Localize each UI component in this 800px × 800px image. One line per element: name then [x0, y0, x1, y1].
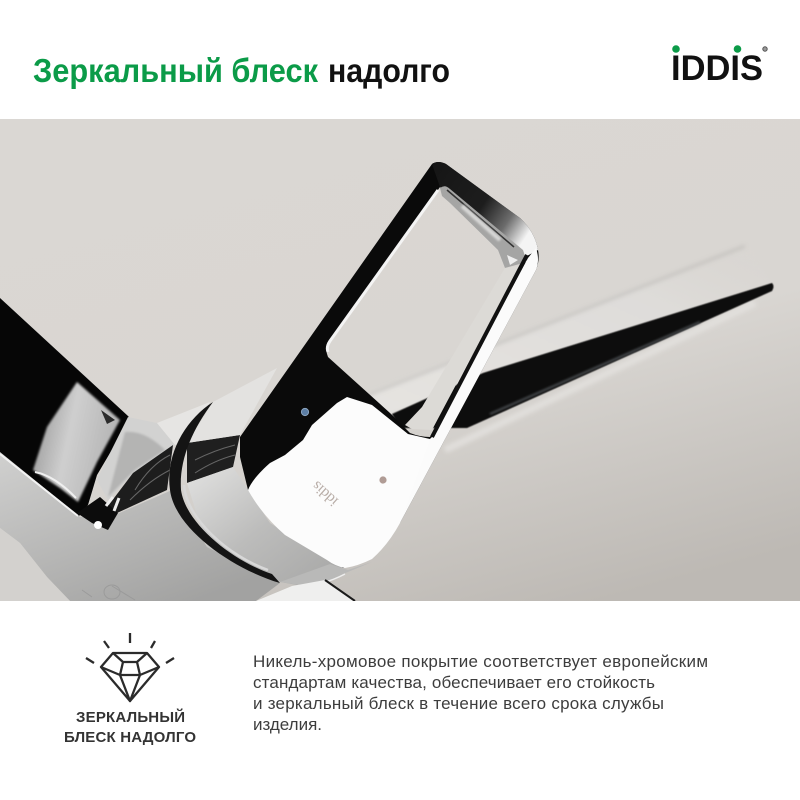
base body of the faucet: [0, 452, 280, 601]
description text: Никель-хромовое покрытие соответствует европейским: [253, 652, 708, 671]
red indicator dot: [379, 476, 387, 484]
photo: chrome faucet close-up: [0, 119, 800, 601]
title: Зеркальный блеск: [33, 52, 318, 89]
icon caption: БЛЕСК НАДОЛГО: [64, 729, 196, 746]
base marking: [82, 585, 135, 600]
white rim along the hole: [327, 190, 438, 352]
title: надолго: [328, 52, 450, 89]
icon: diamond with rays: [86, 633, 174, 701]
left spout: black chrome: [0, 298, 130, 516]
handle frame: [240, 162, 539, 568]
right white strip: [400, 250, 538, 524]
inner bevel right: [405, 352, 473, 430]
neck chrome: [108, 417, 130, 456]
logo: IDDIS: IDDIS: [671, 49, 763, 88]
bottom reflection and black line: [256, 580, 355, 601]
description text: изделия.: [253, 715, 322, 734]
collar lower surface: [187, 467, 343, 585]
description text: стандартам качества, обеспечивает его стойкость: [253, 673, 655, 692]
spout in the background: [360, 243, 774, 450]
description text: и зеркальный блеск в течение всего срока службы: [253, 694, 664, 713]
top band highlight: [432, 162, 538, 257]
dark textured band: [77, 435, 240, 530]
icon caption: [64, 708, 196, 746]
collar crescent: [169, 402, 280, 583]
inner bevel top: [440, 186, 527, 268]
engraved brand: iddis: [309, 477, 342, 509]
collar top: [187, 368, 277, 443]
description text: [253, 652, 708, 734]
white face of the handle: [248, 397, 430, 568]
spout reflection: [33, 382, 120, 502]
blue indicator dot: [301, 408, 309, 416]
handle with hole: [240, 162, 539, 586]
lower-left surface: [28, 570, 70, 601]
icon caption: ЗЕРКАЛЬНЫЙ: [76, 708, 185, 726]
face lower rim: [281, 564, 368, 584]
